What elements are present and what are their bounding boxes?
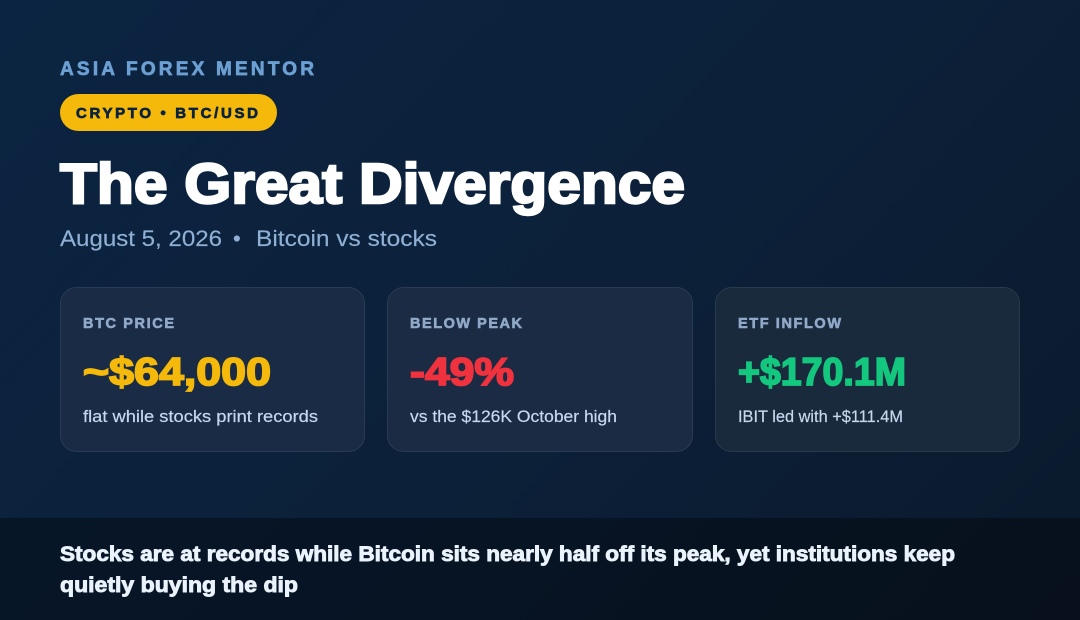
brand name: ASIA FOREX MENTOR [60, 59, 314, 80]
below peak label: BELOW PEAK [410, 316, 523, 332]
subtitle [60, 226, 437, 251]
ETF inflow value: +$170.1M [738, 351, 906, 394]
category pill [60, 94, 277, 131]
BTC price value: ~$64,000 [83, 351, 271, 394]
panel: ETF inflow [716, 288, 1020, 452]
ETF inflow label: ETF INFLOW [738, 316, 841, 332]
subtitle: • [233, 226, 241, 251]
panel: below peak [388, 288, 692, 452]
takeaway band: Stocks are at records while Bitcoin sits nearly half off its peak, yet institutions keep [60, 542, 955, 566]
below peak value: -49% [410, 351, 514, 394]
ETF inflow note: IBIT led with +$111.4M [738, 408, 903, 426]
subtitle: Bitcoin vs stocks [256, 226, 437, 251]
below peak note: vs the $126K October high [410, 408, 617, 426]
BTC price note: flat while stocks print records [83, 408, 318, 426]
takeaway band [0, 518, 1080, 620]
subtitle: August 5, 2026 [60, 226, 222, 251]
BTC price label: BTC PRICE [83, 316, 174, 332]
takeaway band: quietly buying the dip [60, 573, 298, 597]
panel: BTC price [60, 288, 364, 452]
category pill: CRYPTO • BTC/USD [76, 105, 258, 122]
title: The Great Divergence [60, 152, 685, 216]
